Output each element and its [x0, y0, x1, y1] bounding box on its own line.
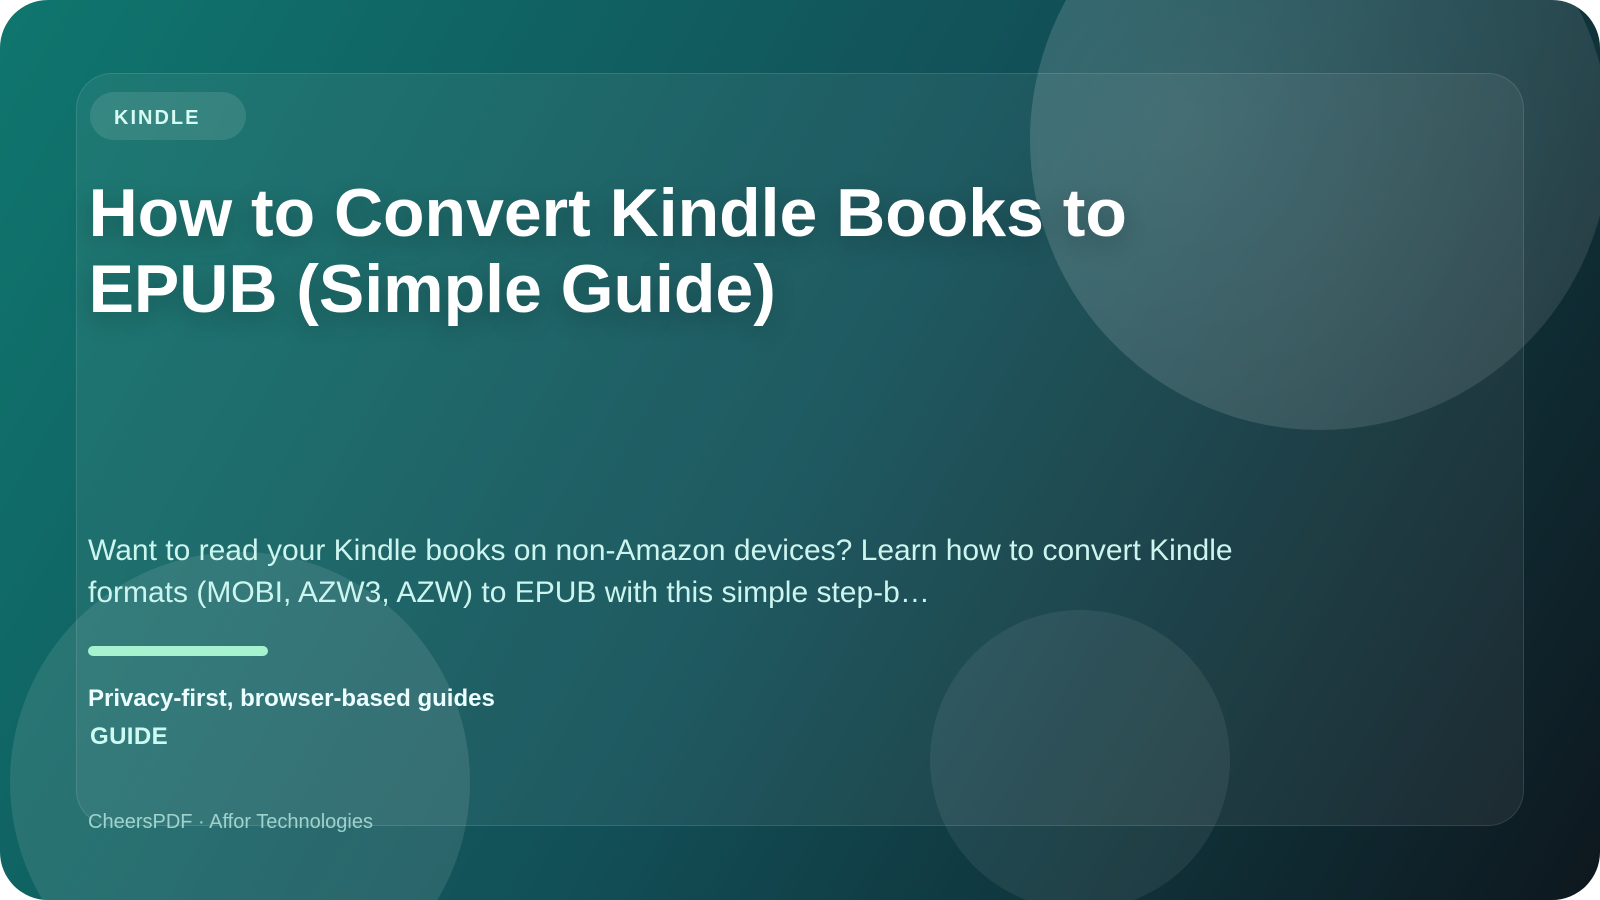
description: Want to read your Kindle books on non-Amazon devices? Learn how to convert Kindle [88, 534, 1233, 567]
footer credit: CheersPDF · Affor Technologies [88, 811, 373, 833]
title [89, 175, 1127, 327]
title: EPUB (Simple Guide) [89, 251, 776, 327]
tagline: Privacy-first, browser-based guides [88, 685, 495, 712]
accent bar [88, 646, 268, 656]
title: How to Convert Kindle Books to [89, 175, 1127, 251]
description: formats (MOBI, AZW3, AZW) to EPUB with this simple step-b… [88, 576, 930, 609]
description [88, 534, 1233, 609]
category pill [90, 92, 246, 140]
glass panel [76, 73, 1524, 826]
pill label: KINDLE [114, 106, 200, 128]
guide label: GUIDE [90, 723, 168, 750]
